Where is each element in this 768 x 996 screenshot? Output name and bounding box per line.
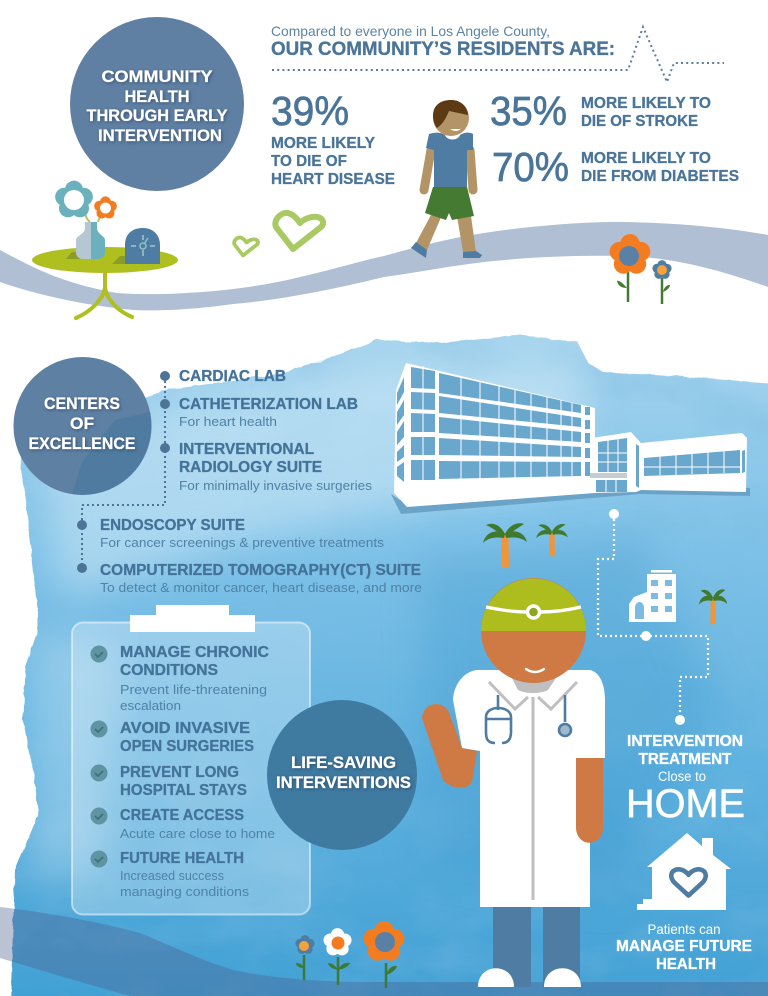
icon: small heart: [234, 237, 258, 256]
benefit: future health: Increased success: [120, 868, 224, 883]
stat: 70% diabetes: 70%: [492, 144, 569, 190]
benefit: prevent long hospital stays: HOSPITAL STAYS: [120, 782, 247, 799]
benefit: avoid invasive surgeries: [120, 720, 254, 755]
doctor: collar and placket: [489, 682, 577, 900]
text: intervention treatment close to home: INTERVENTION: [627, 733, 743, 750]
icon: small hospital: [629, 570, 676, 622]
illustration: hospital building: [391, 363, 750, 514]
text: patients can manage future health: HEALTH: [656, 956, 716, 973]
clipboard panel: benefits: [72, 605, 310, 914]
stat: 35% stroke: DIE OF STROKE: [581, 113, 698, 130]
text: intervention treatment close to home: HOME: [626, 782, 745, 826]
benefit: create access: Acute care close to home: [120, 826, 275, 841]
stat: 39% heart disease: 39%: [271, 88, 349, 134]
doctor: head: [481, 578, 586, 683]
item: endoscopy suite: [100, 517, 385, 550]
stat: 39% heart disease: MORE LIKELY: [271, 135, 375, 152]
icon: large heart: [275, 213, 323, 249]
item: interventional radiology suite: For minimally invasive surgeries: [179, 478, 373, 493]
text: patients can manage future health: Patients can: [648, 921, 720, 937]
heading circle: community health: [70, 17, 244, 191]
doctor: smile: [526, 669, 544, 672]
benefit: create access: CREATE ACCESS: [120, 807, 244, 824]
benefit: future health: FUTURE HEALTH: [120, 850, 244, 867]
stat: 35% stroke: 35%: [490, 88, 567, 134]
benefit: prevent long hospital stays: [120, 764, 247, 799]
heading circle: centers of excellence: CENTERS: [44, 394, 120, 413]
doctor: legs: [493, 900, 580, 987]
heading circle: community health: THROUGH EARLY: [86, 106, 228, 125]
heading circle: life-saving interventions: INTERVENTIONS: [276, 773, 411, 792]
stats intro text: Compared to everyone in Los Angele County,: [271, 23, 550, 39]
text: patients can manage future health: [616, 921, 752, 973]
benefit: manage chronic conditions: CONDITIONS: [120, 662, 218, 679]
background: watercolor wash: [11, 334, 768, 996]
item: endoscopy suite: ENDOSCOPY SUITE: [100, 517, 245, 534]
stats intro text: [271, 23, 615, 60]
doctor: head mirror band: [486, 606, 581, 618]
text: patients can manage future health: MANAGE FUTURE: [616, 938, 752, 955]
item: catheterization lab: For heart health: [179, 414, 277, 429]
heading circle: life-saving interventions: [267, 700, 417, 850]
stat: 39% heart disease: [271, 88, 395, 188]
benefit: manage chronic conditions: MANAGE CHRONIC: [120, 644, 269, 661]
heading circle: life-saving interventions: LIFE-SAVING: [291, 753, 396, 772]
heading circle: community health: COMMUNITY: [102, 67, 213, 86]
item: endoscopy suite: For cancer screenings & preventive treatments: [100, 535, 385, 550]
stat: 70% diabetes: MORE LIKELY TO: [581, 150, 711, 167]
list: centers of excellence: [77, 368, 422, 595]
band: bottom wavy path: [0, 907, 768, 996]
item: ct suite: To detect & monitor cancer, heart disease, and more: [100, 580, 422, 595]
doctor: stethoscope: [486, 695, 571, 743]
text: intervention treatment close to home: TREATMENT: [638, 751, 732, 768]
doctor: lowered arm: [576, 758, 603, 843]
heading circle: centers of excellence: [14, 357, 152, 495]
item: ct suite: [100, 562, 422, 595]
benefit: avoid invasive surgeries: AVOID INVASIVE: [120, 720, 250, 737]
item: interventional radiology suite: [179, 441, 373, 493]
stat: 70% diabetes: DIE FROM DIABETES: [581, 168, 739, 185]
icon: bottom flowers: [295, 921, 404, 988]
icon: house with heart: [637, 833, 731, 910]
item: interventional radiology suite: INTERVENTIONAL: [179, 441, 314, 458]
doctor: raised arm: [422, 704, 477, 788]
text: intervention treatment close to home: Close to: [658, 769, 706, 784]
benefit: avoid invasive surgeries: OPEN SURGERIES: [120, 738, 254, 755]
illustration: doctor: [422, 578, 605, 987]
heading circle: centers of excellence: OF: [70, 414, 94, 433]
benefit: manage chronic conditions: Prevent life-threatening: [120, 682, 267, 697]
clipboard clip: [130, 605, 255, 632]
stat: 39% heart disease: TO DIE OF: [271, 153, 347, 170]
icon: top flowers: [610, 234, 672, 304]
doctor: coat: [453, 670, 605, 907]
heading circle: centers of excellence: EXCELLENCE: [28, 434, 136, 453]
item: catheterization lab: [179, 396, 358, 429]
stat: 70% diabetes: [492, 144, 739, 190]
item: cardiac lab: CARDIAC LAB: [179, 368, 286, 385]
heading circle: community health: HEALTH: [124, 87, 190, 106]
icon: walking boy: [411, 100, 482, 258]
benefit: create access: [120, 807, 275, 841]
heartbeat dotted line: [272, 27, 724, 82]
benefit: manage chronic conditions: [120, 644, 269, 713]
stat: 39% heart disease: HEART DISEASE: [271, 171, 395, 188]
icon: palm trees near hospital: [483, 523, 568, 568]
item: interventional radiology suite: RADIOLOGY SUITE: [179, 459, 322, 476]
doctor: cap: [481, 578, 586, 631]
stat: 35% stroke: [490, 88, 711, 134]
icon: single palm: [699, 589, 727, 624]
heading circle: community health: INTERVENTION: [98, 126, 222, 145]
icon: table with vase and clock: [32, 181, 178, 318]
benefit: prevent long hospital stays: PREVENT LONG: [120, 764, 239, 781]
connector: dotted route to home: [598, 509, 708, 725]
text: intervention treatment close to home: [626, 733, 745, 826]
band: top wavy path: [0, 222, 768, 310]
doctor: neck: [512, 678, 556, 693]
benefit: manage chronic conditions: escalation: [120, 698, 181, 713]
stats intro text: OUR COMMUNITY’S RESIDENTS ARE:: [271, 39, 615, 60]
item: catheterization lab: CATHETERIZATION LAB: [179, 396, 358, 413]
benefit: future health: managing conditions: [120, 884, 250, 899]
item: ct suite: COMPUTERIZED TOMOGRAPHY(CT) SUITE: [100, 562, 421, 579]
stat: 35% stroke: MORE LIKELY TO: [581, 95, 711, 112]
benefit: future health: [120, 850, 250, 899]
check icons: [90, 646, 108, 868]
doctor: shoes: [478, 968, 581, 987]
